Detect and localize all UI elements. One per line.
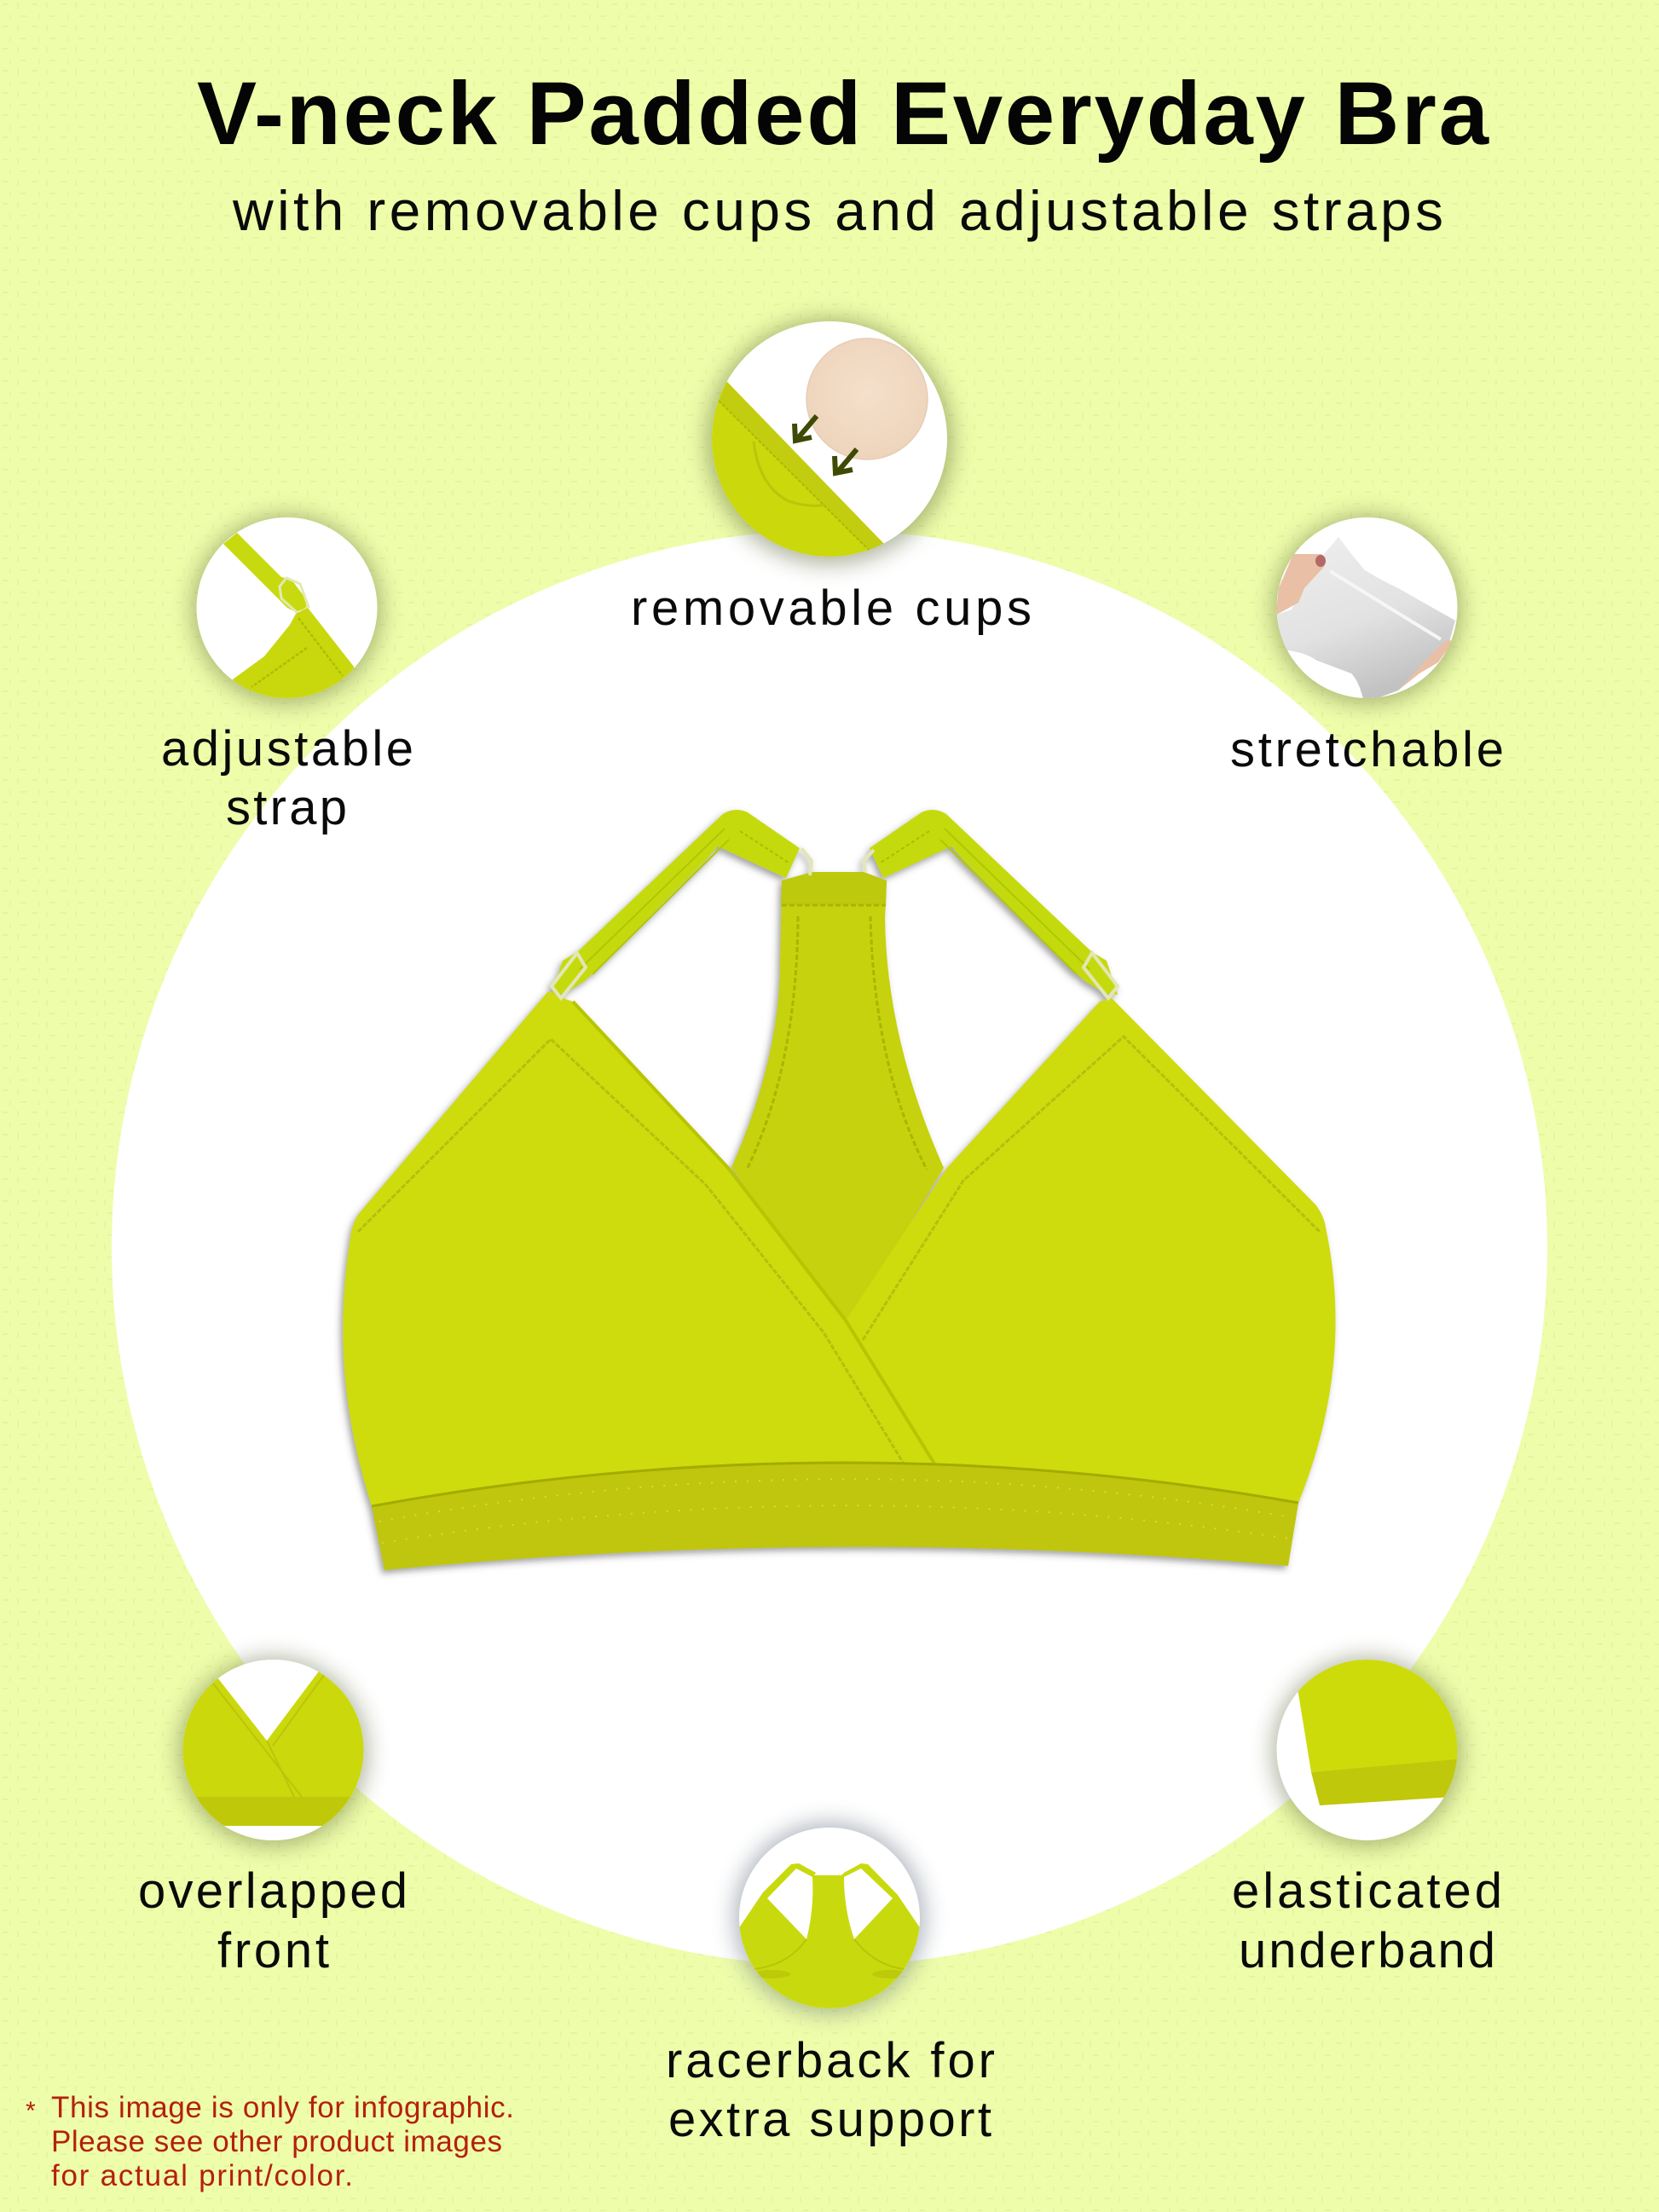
label: racerback for extra support: racerback for: [666, 2033, 995, 2088]
subtitle: with removable cups and adjustable straps: [232, 179, 1443, 242]
left cup binding edge: [573, 1002, 934, 1464]
right strap: [870, 810, 1118, 995]
left cut-out: [767, 1868, 812, 1939]
cup crop: [232, 608, 354, 698]
underband dots: [379, 1479, 1292, 1543]
label: overlapped front: [138, 1863, 408, 1978]
strap ring: [280, 578, 309, 614]
label: adjustable strap: strap: [226, 780, 347, 835]
right cup: [846, 998, 1336, 1503]
footnote: Please see other product images: [51, 2125, 502, 2158]
label: racerback for extra support: extra support: [668, 2092, 991, 2147]
right hand: [1398, 640, 1451, 690]
underband crop: [196, 1797, 350, 1826]
shadow: [179, 1657, 368, 1846]
footnote: This image is only for infographic.: [51, 2091, 514, 2124]
title: V-neck Padded Everyday Bra: [197, 64, 1490, 164]
strap stitching: [580, 829, 1090, 974]
label: overlapped front: front: [217, 1923, 329, 1978]
white disc: [739, 1828, 920, 2008]
adjuster rings: [552, 848, 1118, 998]
stretched fabric: [1270, 537, 1455, 703]
label: overlapped front: overlapped: [138, 1863, 408, 1919]
right cup seams: [863, 1037, 1320, 1340]
cups crop: [182, 1671, 363, 1797]
left cup seams: [358, 1039, 904, 1464]
thumbnail: racerback: [734, 1822, 925, 2013]
arrow 2: [835, 449, 857, 473]
large white circle panel: [112, 530, 1547, 1966]
cup pocket stitching: [754, 442, 825, 505]
white disc: [196, 517, 377, 698]
left cup: [343, 991, 934, 1506]
footnote: *: [26, 2097, 36, 2125]
white disc: [182, 1660, 363, 1840]
thumbnail: stretchable: [1270, 515, 1461, 704]
edge binding: [719, 382, 884, 552]
right cut-out: [844, 1868, 893, 1939]
fabric crop: [1298, 1660, 1458, 1772]
racerback garment: [738, 1863, 921, 2012]
racerback neck band: [781, 872, 887, 905]
underband stitching: [372, 1463, 1298, 1506]
seam curves: [754, 1939, 904, 1969]
shadow: [707, 319, 952, 564]
racerback panel: [731, 872, 944, 1330]
thumbnail: elasticated underband: [1272, 1645, 1466, 1846]
shadow: [734, 1822, 925, 2013]
label: removable cups: removable cups: [631, 580, 1032, 636]
shadow: [193, 515, 382, 704]
label: adjustable strap: adjustable: [161, 721, 413, 777]
racerback stitching: [747, 905, 927, 1170]
fabric fold: [1330, 571, 1441, 639]
label: racerback for extra support: [666, 2033, 995, 2147]
label: adjustable strap: [161, 721, 413, 835]
footnote: for actual print/color.: [51, 2159, 353, 2192]
underband: [372, 1463, 1298, 1570]
overlap seams: [213, 1675, 324, 1797]
strap crop: [223, 533, 307, 612]
underband crop: [1311, 1759, 1466, 1805]
label: elasticated underband: underband: [1239, 1923, 1495, 1978]
shadow: [1272, 515, 1461, 704]
bra edge crop: [712, 382, 883, 557]
thumbnail: adjustable strap: [193, 515, 382, 707]
footnote: [26, 2091, 514, 2192]
arrow 1: [795, 416, 817, 441]
main product illustration: bra: [343, 810, 1336, 1570]
white disc: [1277, 517, 1458, 698]
cup seams: [251, 618, 343, 687]
band shadow folds: [757, 1970, 790, 1978]
label: stretchable: stretchable: [1230, 722, 1504, 777]
removable pad: [806, 338, 928, 459]
label: elasticated underband: elasticated: [1232, 1863, 1502, 1919]
white disc: [1277, 1660, 1458, 1840]
white disc: [712, 321, 947, 557]
left hand: [1275, 554, 1326, 615]
shadow: [1272, 1657, 1461, 1846]
fingernail: [1315, 555, 1326, 567]
thumbnail: overlapped front: [171, 1645, 375, 1850]
left strap: [552, 810, 800, 995]
label: elasticated underband: [1232, 1863, 1502, 1978]
thumbnail: removable cups: [682, 319, 952, 580]
